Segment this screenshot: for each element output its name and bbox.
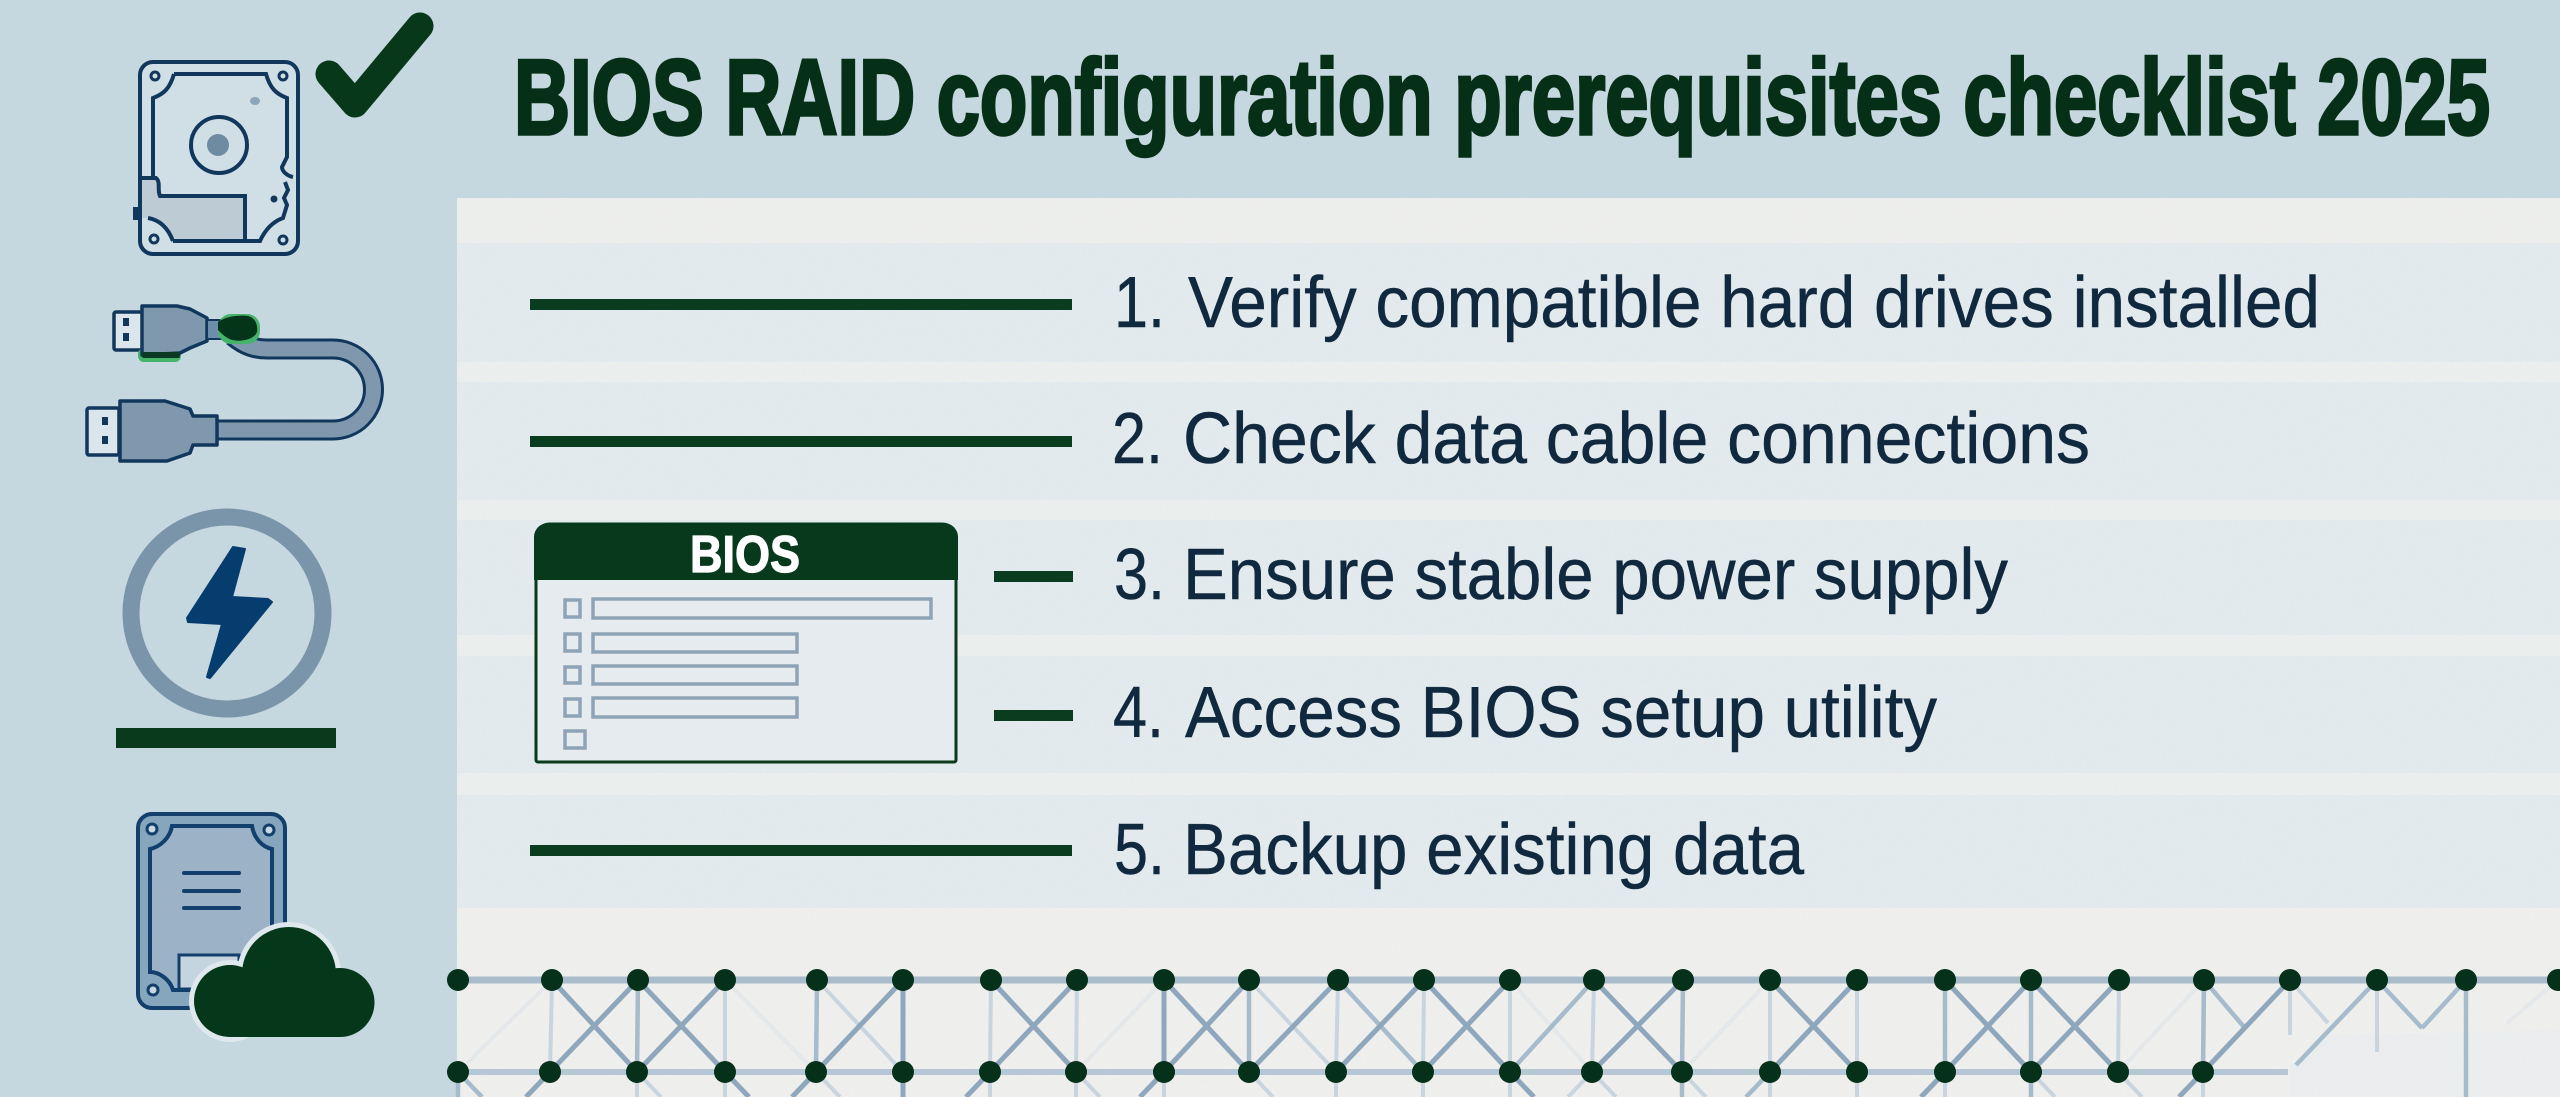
horizontal links xyxy=(458,980,2560,1072)
item 5 text: Backup existing data xyxy=(1183,810,1805,890)
connector line 2 xyxy=(530,436,1072,447)
RAID network diagram xyxy=(447,969,2560,1097)
BIOS setup window xyxy=(534,523,958,762)
item 2 text: Check data cable connections xyxy=(1183,399,2090,479)
power underline bar xyxy=(116,728,336,748)
network nodes bottom row xyxy=(447,1061,2214,1083)
item 4 text: Access BIOS setup utility xyxy=(1185,673,1937,753)
item 1 text: 1. xyxy=(1114,263,1165,343)
icon: cloud xyxy=(194,927,374,1037)
cross links xyxy=(458,980,2558,1097)
icon: data cable xyxy=(87,306,374,461)
icon: check mark xyxy=(329,26,420,104)
icon: hard drive xyxy=(133,62,298,254)
connector dash 3 xyxy=(994,571,1073,582)
connector line 5 xyxy=(530,845,1072,856)
item 2 text: 2. xyxy=(1112,399,1163,479)
connector dash 4 xyxy=(994,710,1073,721)
connector line 1 xyxy=(530,299,1072,310)
icon: backup drive with cloud xyxy=(138,814,374,1037)
panel: checklist background xyxy=(457,198,2560,1097)
item 4 text: 4. xyxy=(1113,673,1164,753)
item 3 text: 3. xyxy=(1114,535,1165,615)
item 5 text: 5. xyxy=(1114,810,1165,890)
item 3 text: Ensure stable power supply xyxy=(1183,535,2008,615)
item 1 text: Verify compatible hard drives installed xyxy=(1188,263,2320,343)
network nodes top row xyxy=(447,969,2560,991)
BIOS option rows xyxy=(565,599,931,748)
BIOS label: BIOS xyxy=(690,526,800,584)
icon: power bolt in ring xyxy=(131,517,323,709)
